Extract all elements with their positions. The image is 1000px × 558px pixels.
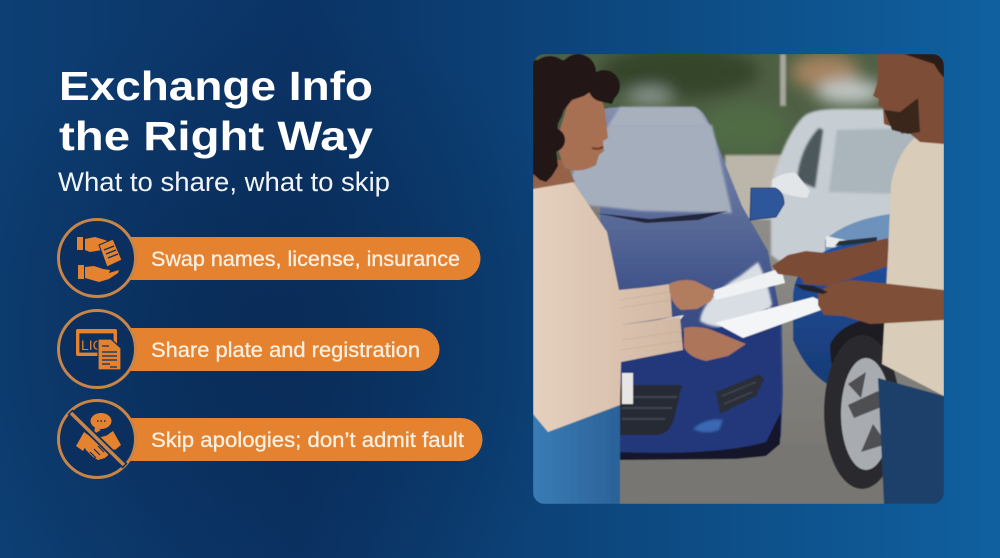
label pill: Swap names, license, insurance <box>151 248 460 271</box>
title: the Right Way <box>59 113 373 159</box>
phone <box>794 284 828 294</box>
label pill <box>125 418 482 461</box>
item: skip apologies <box>58 400 482 478</box>
photo background: trees and road <box>533 46 944 504</box>
woman's jeans <box>533 400 620 504</box>
label pill <box>125 237 480 280</box>
icon: license plate and document <box>58 310 136 388</box>
label pill <box>125 328 440 371</box>
damaged blue car and wheel <box>793 240 900 489</box>
white car <box>770 107 916 262</box>
item: share plate and registration <box>58 310 440 388</box>
icon: hands exchanging document <box>58 220 136 296</box>
man: far arm, shirt, jeans, head <box>772 54 944 504</box>
title <box>59 63 373 159</box>
label pill: Skip apologies; don’t admit fault <box>151 429 464 452</box>
subtitle: What to share, what to skip <box>58 167 390 197</box>
woman with hair and sweater <box>529 54 746 432</box>
documents <box>711 268 832 338</box>
label pill: Share plate and registration <box>151 339 420 362</box>
icon: crossed-out handshake and speech bubble <box>58 400 136 478</box>
item: swap names, license, insurance <box>58 220 480 296</box>
title: Exchange Info <box>59 63 373 109</box>
icon: license plate and document: LIC <box>81 337 103 353</box>
photo: two drivers exchanging documents in front of damaged cars <box>529 46 944 504</box>
blue car <box>566 107 784 460</box>
